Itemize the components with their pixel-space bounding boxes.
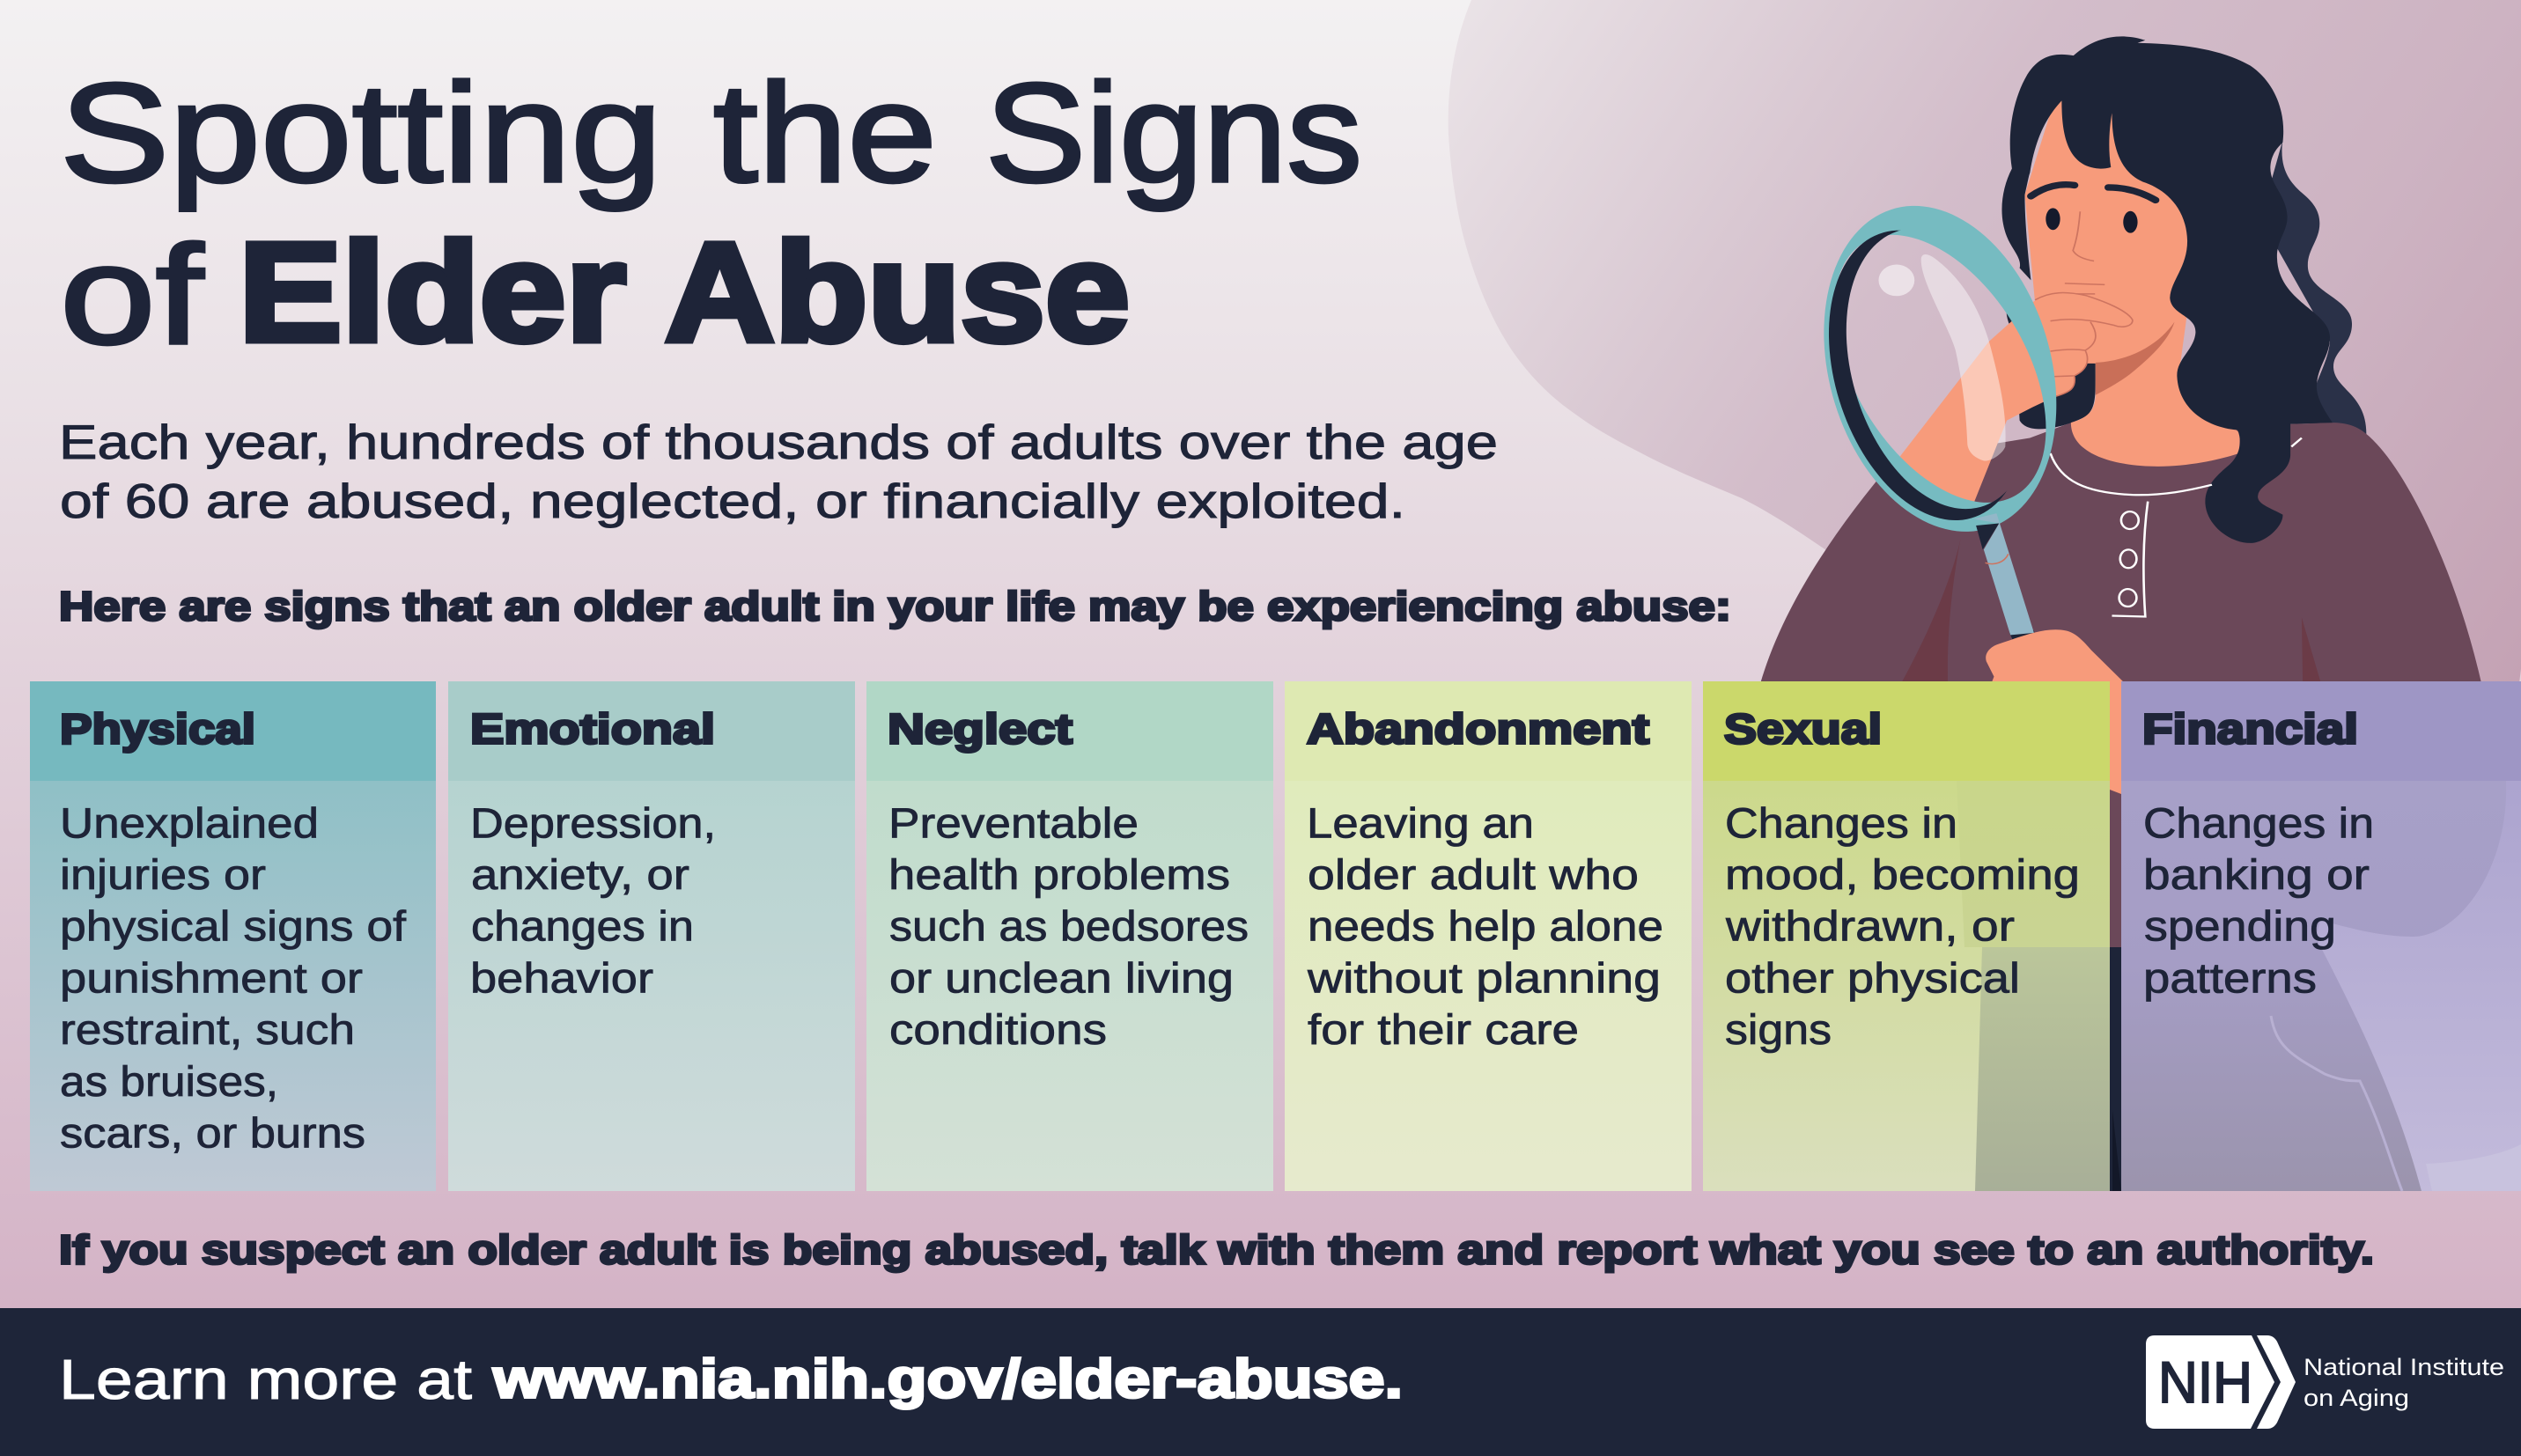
- panel: Physical: punishment or: [60, 956, 363, 1002]
- finger lines: [2035, 293, 2133, 396]
- eyes: [2046, 208, 2138, 233]
- eyebrows: [2031, 185, 2156, 200]
- panel: Abandonment: [1285, 681, 1692, 1191]
- footer text: [59, 1348, 1403, 1411]
- lead-in sentence: Here are signs that an older adult in your life may be experiencing abuse:: [59, 583, 1731, 629]
- hand holding handle: [1986, 629, 2125, 683]
- panel: Sexual: withdrawn, or: [1725, 903, 2015, 951]
- panel: Abandonment: older adult who: [1308, 852, 1639, 899]
- panel: Neglect: Neglect: [888, 706, 1073, 754]
- neck and face: [2024, 96, 2240, 467]
- panel: Neglect: or unclean living: [889, 956, 1234, 1002]
- panel: Physical: restraint, such: [60, 1007, 355, 1054]
- panel: Sexual: mood, becoming: [1725, 852, 2080, 899]
- footer bar: [0, 1308, 2521, 1456]
- panel: Sexual: Sexual: [1724, 706, 1882, 754]
- intro text: [59, 415, 1498, 528]
- NIH logo: National Institute: [2304, 1354, 2504, 1380]
- panel: Financial: [2121, 681, 2521, 1191]
- panel: Emotional: Depression,: [470, 801, 716, 847]
- footer text: Learn more at: [59, 1348, 472, 1411]
- magnifier handle: [1973, 513, 2034, 635]
- panel: Emotional: behavior: [470, 956, 653, 1002]
- panel: Sexual: [1703, 681, 2110, 1191]
- panel: Sexual: signs: [1725, 1007, 1832, 1054]
- panel: Abandonment: for their care: [1308, 1007, 1579, 1054]
- panel: Emotional: changes in: [471, 903, 694, 951]
- panel: Financial: Changes in: [2143, 801, 2374, 847]
- panel: Neglect: conditions: [889, 1007, 1107, 1054]
- panel: Neglect: [866, 681, 1273, 1191]
- body: [1761, 423, 2481, 682]
- panel: Sexual: other physical: [1725, 956, 2020, 1002]
- panel: Abandonment: without planning: [1307, 956, 1661, 1002]
- intro text: Each year, hundreds of thousands of adults over the age: [59, 415, 1498, 469]
- intro text: of 60 are abused, neglected, or financially exploited.: [60, 474, 1405, 528]
- title: Spotting: [60, 54, 662, 211]
- handle mark: [1986, 554, 2009, 564]
- panel: Financial: Financial: [2142, 706, 2358, 754]
- panel: Physical: physical signs of: [60, 903, 407, 951]
- handle shadow: [1976, 524, 2038, 643]
- footer text: www.nia.nih.gov/elder-abuse.: [492, 1349, 1403, 1410]
- NIH logo: NIH: [2158, 1349, 2252, 1415]
- panel: Financial: patterns: [2143, 956, 2317, 1002]
- illustration: woman with magnifying glass: [1761, 36, 2481, 683]
- panel: Emotional: [448, 681, 855, 1191]
- magnifier inner rim: [1829, 231, 2008, 520]
- panel: Abandonment: Leaving an: [1307, 801, 1534, 847]
- panel: Financial: banking or: [2143, 852, 2370, 899]
- panel: Neglect: Preventable: [888, 801, 1139, 847]
- panel: Physical: [30, 681, 436, 1191]
- panel: Physical: scars, or burns: [60, 1111, 365, 1157]
- panel: Emotional: Emotional: [470, 706, 715, 754]
- panel: Neglect: health problems: [888, 852, 1230, 899]
- hair behind hand: [2006, 280, 2096, 429]
- body strip between cards: [2110, 680, 2121, 1191]
- neck shadow: [2096, 322, 2175, 395]
- panel: Abandonment: needs help alone: [1308, 903, 1663, 951]
- nose and mouth lines: [2065, 211, 2105, 294]
- panel: Abandonment: Abandonment: [1307, 706, 1649, 754]
- title: Elder: [239, 213, 626, 371]
- glass highlight dot: [1878, 264, 1914, 296]
- panel: Financial: spending: [2144, 903, 2336, 951]
- NIH logo: on Aging: [2304, 1385, 2409, 1411]
- NIH logo: [2146, 1335, 2504, 1429]
- magnifier ring: [1824, 206, 2057, 532]
- arm and hand at chin: [1894, 293, 2133, 511]
- panel: Physical: Physical: [60, 706, 255, 754]
- panel: Emotional: anxiety, or: [471, 852, 689, 899]
- shirt details: [2051, 438, 2302, 616]
- background blob: [1448, 0, 2521, 937]
- glass highlight streak: [1921, 254, 2006, 461]
- sleeve creases: [1902, 539, 2320, 682]
- call to action: If you suspect an older adult is being abused, talk with them and report what you see to an authority.: [59, 1227, 2374, 1273]
- title: Signs: [985, 54, 1362, 211]
- panel: Physical: Unexplained: [60, 801, 319, 847]
- title: of: [60, 216, 204, 373]
- panel: Physical: injuries or: [60, 852, 266, 899]
- title: [60, 54, 1362, 373]
- panel: Sexual: Changes in: [1725, 801, 1957, 847]
- panel: Physical: as bruises,: [60, 1059, 278, 1106]
- back hair: [2260, 140, 2366, 436]
- title: Abuse: [665, 213, 1130, 371]
- panel: Neglect: such as bedsores: [889, 903, 1249, 951]
- front hair: [2001, 36, 2333, 543]
- title: the: [713, 54, 937, 211]
